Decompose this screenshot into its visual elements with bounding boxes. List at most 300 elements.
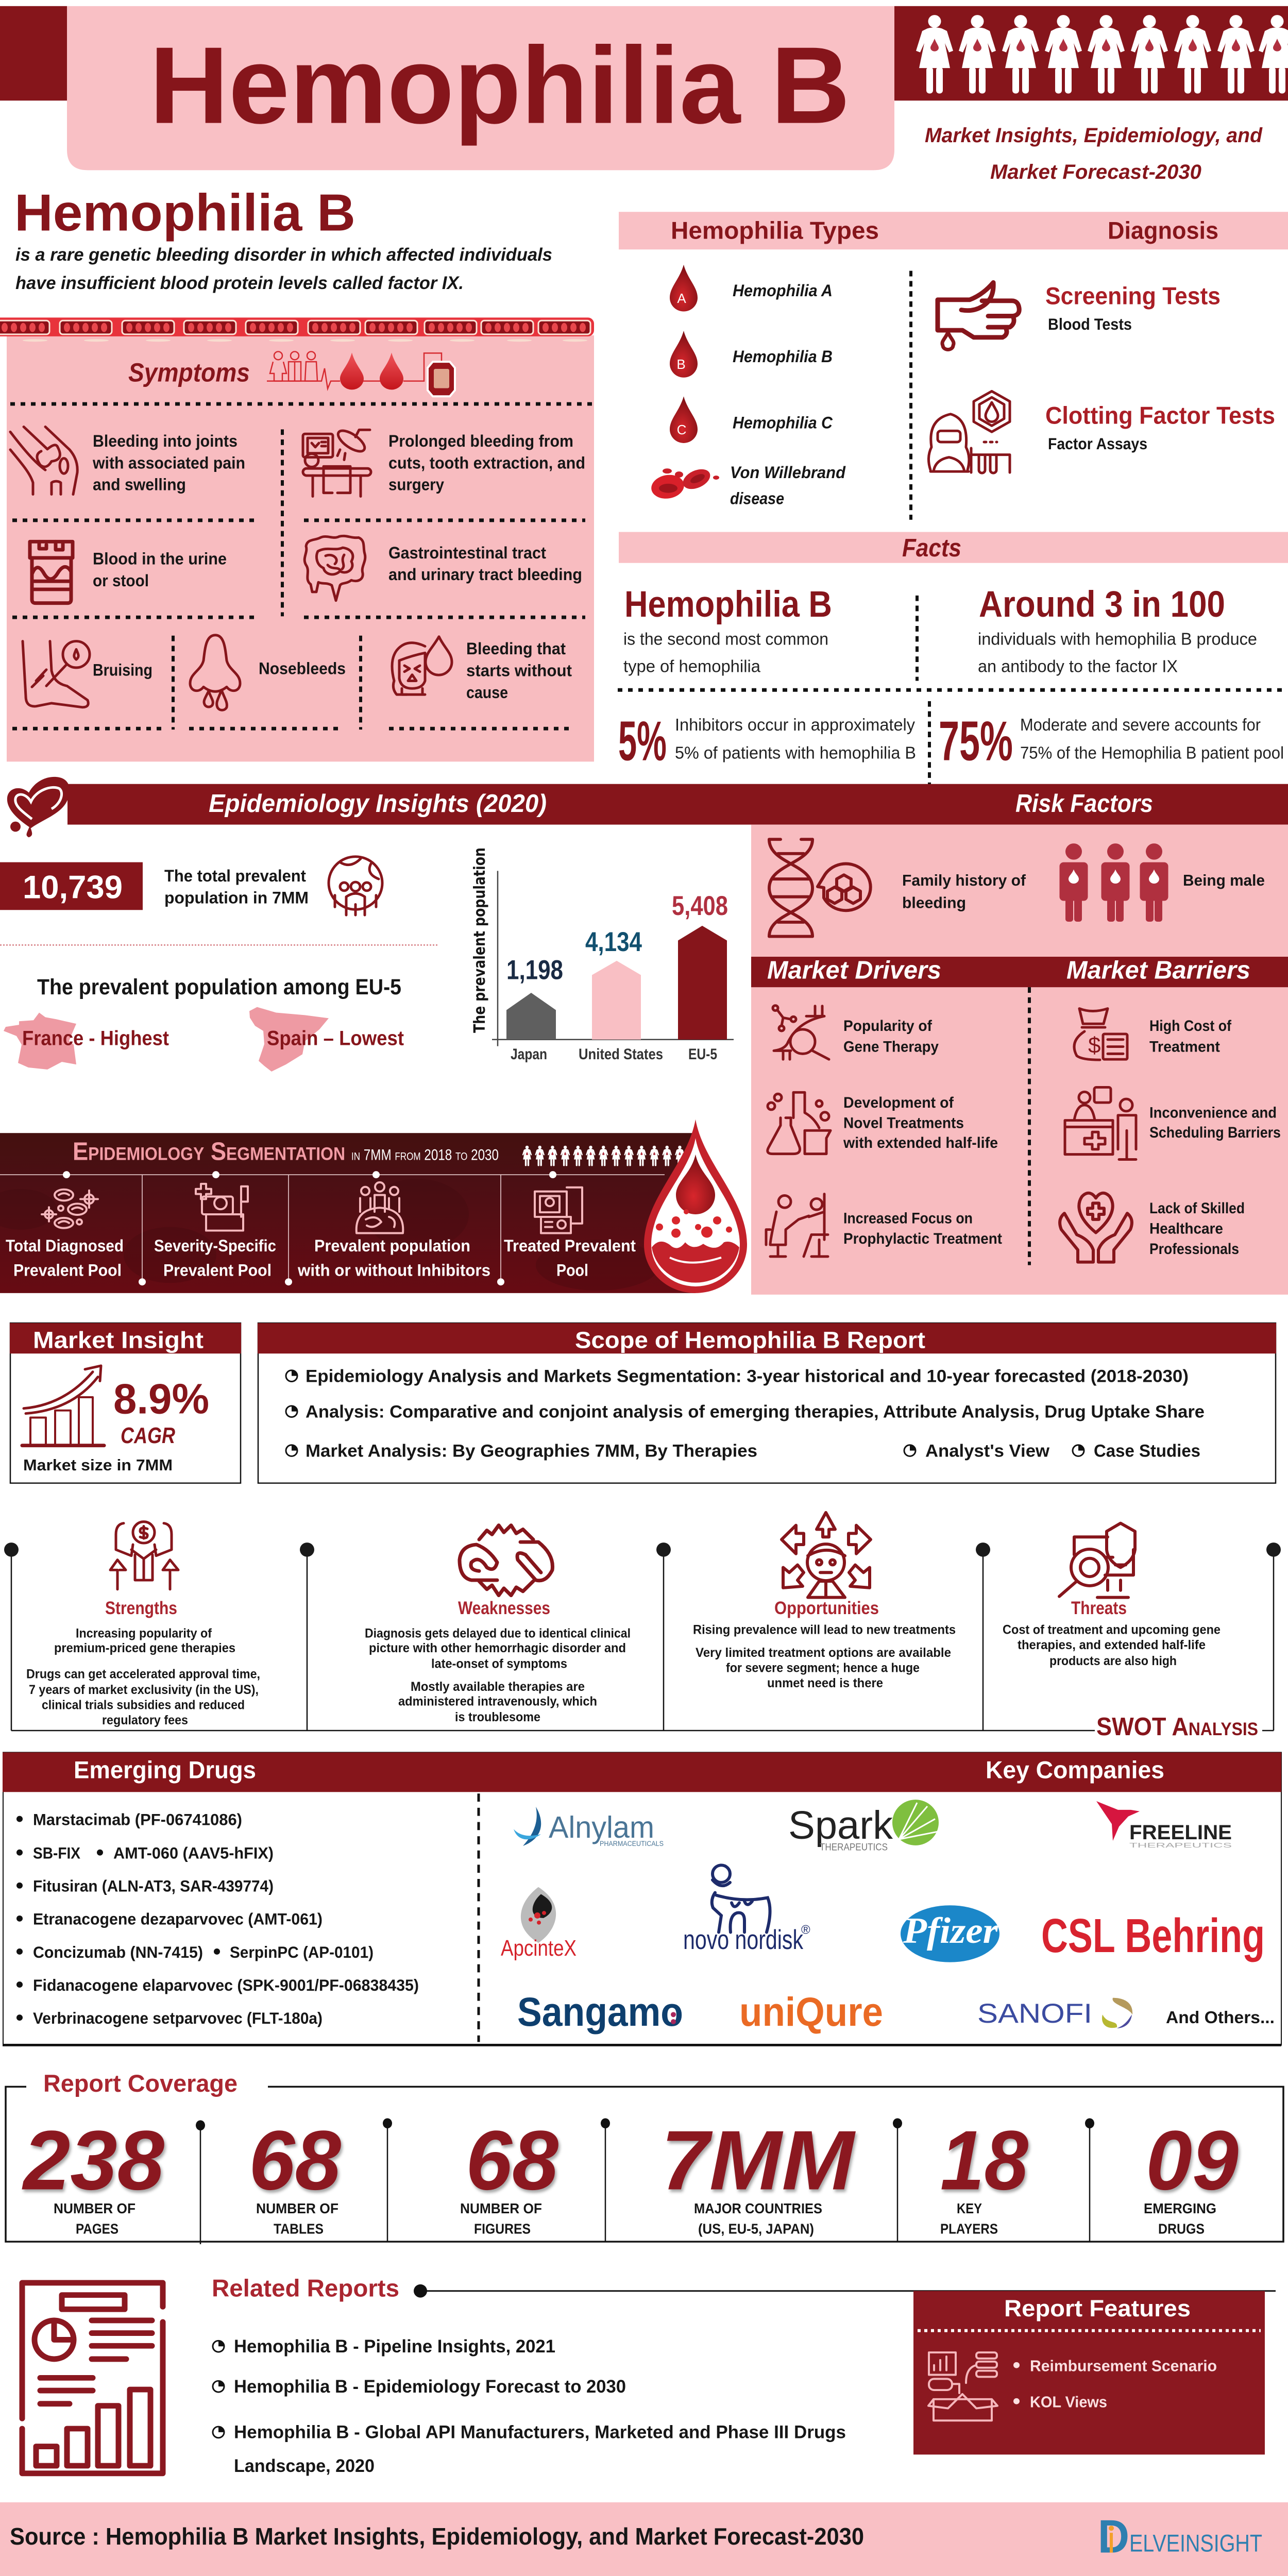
emerging drugs list: AMT-060 (AAV5-hFIX) — [113, 1844, 274, 1862]
drivers barriers header — [751, 956, 1288, 987]
chart: prevalent population — [471, 848, 734, 1063]
segment text: diagnosed — [6, 1236, 124, 1279]
driver text: novel treatments: Development of — [843, 1094, 954, 1111]
fact: 75 percent: Moderate and severe accounts for — [1020, 715, 1261, 735]
stat: key players: PLAYERS — [940, 2221, 998, 2236]
report features list: KOL Views — [1030, 2393, 1107, 2411]
map: Spain: Spain – Lowest — [267, 1027, 404, 1050]
icon: foot bruise — [23, 641, 90, 707]
symptom text: joints: and swelling — [93, 475, 186, 494]
icon: doctor and patient — [766, 1194, 828, 1257]
market insight header: Market Insight — [33, 1327, 204, 1353]
epidemiology banner: Risk Factors — [1015, 789, 1153, 818]
intro text — [15, 244, 552, 293]
fact: second most common: type of hemophilia — [623, 657, 760, 676]
barrier text: scheduling: Inconvenience and — [1149, 1105, 1277, 1122]
fact: 75 percent: 75% — [939, 710, 1013, 772]
bar: EU-5: EU-5 — [688, 1046, 717, 1063]
symptom text: joints: with associated pain — [92, 453, 245, 472]
dividers — [10, 404, 594, 730]
stat: figures: NUMBER OF — [460, 2200, 542, 2216]
symptom text: bleeding cuts: surgery — [388, 475, 445, 494]
map: France — [4, 1012, 169, 1070]
segment text: inhibitors: Prevalent population — [314, 1236, 470, 1255]
SWOT text: threats: Cost of treatment and upcoming gene — [1003, 1623, 1221, 1637]
segmentation heading: Epidemiology Segmentation — [73, 1137, 345, 1165]
map: Spain — [249, 1007, 404, 1072]
scope item 3: Market Analysis: By Geographies 7MM, By Therapies — [306, 1442, 757, 1461]
barrier text: scheduling — [1149, 1105, 1281, 1141]
logo: Pfizer — [901, 1905, 999, 1962]
segment text: inhibitors: with or without Inhibitors — [297, 1261, 490, 1279]
screening tests text: Blood Tests — [1048, 315, 1132, 333]
stat: total prevalent population: The total prevalent — [164, 866, 306, 885]
SWOT text: threats: products are also high — [1049, 1654, 1177, 1668]
SWOT text: opportunities: unmet need is there — [767, 1676, 883, 1690]
icon: strengths — [110, 1522, 178, 1589]
drugs companies header: Emerging Drugs — [74, 1757, 256, 1784]
barrier text: skilled professionals: Healthcare — [1149, 1221, 1223, 1237]
panel: report coverage — [6, 2070, 1283, 2244]
source line: Source : Hemophilia B Market Insights, Epidemiology, and Market Forecast-2030 — [10, 2523, 864, 2550]
icon: hands holding heart — [1060, 1193, 1132, 1262]
logo: Sanofi: SANOFI — [977, 1998, 1092, 2029]
EU-5 heading: The prevalent population among EU-5 — [37, 975, 401, 999]
driver text: prophylactic: Increased Focus on — [843, 1210, 973, 1227]
market insight header — [10, 1323, 241, 1353]
symptom text: gastrointestinal: and urinary tract bleeding — [388, 565, 582, 584]
bar: Japan: Japan — [511, 1046, 547, 1063]
emerging drugs list: Etranacogene dezaparvovec (AMT-061) — [33, 1910, 323, 1928]
related reports heading — [212, 2275, 1276, 2302]
drivers barriers header: Market Barriers — [1066, 956, 1250, 984]
map: France: France - Highest — [22, 1027, 169, 1050]
stat: figures: 68 — [466, 2113, 558, 2207]
scope item 1: Epidemiology Analysis and Markets Segmentation: 3-year historical and 10-year forecasted (2018-2030) — [306, 1367, 1189, 1386]
driver text: gene therapy — [843, 1018, 939, 1055]
icon: patient and drip — [196, 1184, 248, 1231]
icon: cell bubble — [818, 864, 871, 910]
SWOT text: threats — [1003, 1623, 1221, 1668]
SWOT text: opportunities: Very limited treatment options are available — [696, 1646, 951, 1660]
SWOT text: opportunities: Rising prevalence will lead to new treatments — [693, 1623, 956, 1637]
driver text: prophylactic — [843, 1210, 1002, 1247]
screening tests text — [1045, 283, 1221, 333]
icon: box and data — [928, 2352, 997, 2420]
stat: tables: 68 — [249, 2113, 341, 2207]
symptoms heading: Symptoms — [128, 358, 250, 387]
stat: emerging drugs: DRUGS — [1158, 2221, 1205, 2236]
drugs companies header: Key Companies — [986, 1757, 1164, 1784]
decorative thin line — [0, 944, 438, 945]
symptom text: without cause: starts without — [466, 661, 572, 680]
coverage heading: Report Coverage — [43, 2070, 238, 2097]
logo: uniQure: uniQure — [739, 1989, 883, 2035]
related report 2: Hemophilia B - Epidemiology Forecast to 2030 — [234, 2376, 626, 2397]
type labels: Hemophilia B — [733, 347, 833, 366]
logo: Pfizer: Pfizer — [903, 1911, 998, 1951]
related report 3: Hemophilia B - Global API Manufacturers, Marketed and Phase III Drugs — [234, 2422, 846, 2443]
fact: second most common — [623, 584, 832, 676]
scope item 4: Analyst's View — [925, 1442, 1050, 1461]
icon: drop B: B — [676, 358, 686, 372]
risk text: family history: Family history of — [902, 871, 1026, 889]
icon: three men — [1059, 843, 1168, 922]
symptom text: bleeding cuts: cuts, tooth extraction, and — [388, 453, 585, 472]
driver text: prophylactic: Prophylactic Treatment — [843, 1230, 1002, 1247]
fact: 75 percent — [939, 710, 1284, 772]
SWOT text: weaknesses — [365, 1627, 631, 1724]
driver text: novel treatments: Novel Treatments — [843, 1115, 964, 1131]
type labels — [730, 281, 846, 507]
logo: Sangamo: Sangamo — [517, 1989, 683, 2035]
logo: Novo Nordisk — [683, 1865, 810, 1955]
SWOT text: weaknesses: Mostly available therapies are — [411, 1680, 585, 1694]
footer band — [0, 2502, 1288, 2576]
risk text: family history — [902, 871, 1026, 911]
panel: emerging drugs and key companies — [3, 1752, 1281, 2045]
logo: Sanofi — [977, 1998, 1132, 2029]
stat: key players: 18 — [940, 2113, 1028, 2207]
icon: drop A: A — [677, 292, 686, 306]
icon: reception desk — [1065, 1087, 1136, 1159]
panel: types and diagnosis — [619, 212, 1288, 520]
emerging drugs list: SB-FIX — [33, 1844, 80, 1862]
scope item 5: Case Studies — [1094, 1442, 1200, 1461]
icon: lab technician — [928, 391, 1010, 473]
type labels: Hemophilia C — [733, 413, 833, 432]
stat: emerging drugs: 09 — [1146, 2113, 1239, 2207]
clotting factor text: Clotting Factor Tests — [1045, 402, 1275, 429]
barrier text: high cost: High Cost of — [1149, 1018, 1231, 1035]
clotting factor text: Factor Assays — [1048, 434, 1147, 453]
CAGR value: 8.9% — [113, 1375, 209, 1422]
segment text: diagnosed: Prevalent Pool — [13, 1261, 122, 1279]
symptom text: urine: or stool — [93, 571, 149, 590]
drugs companies header — [3, 1752, 1281, 1792]
subtitle: Market Forecast-2030 — [990, 161, 1201, 183]
SWOT text: weaknesses: is troublesome — [455, 1710, 540, 1724]
report features heading: Report Features — [1004, 2295, 1191, 2321]
SWOT text: strengths: Increasing popularity of — [76, 1627, 212, 1640]
row of people — [522, 1146, 685, 1166]
logo: Alnylam: PHARMACEUTICALS — [600, 1839, 664, 1848]
icon: knee joint — [10, 427, 77, 495]
bar: Japan: 1,198 — [506, 955, 563, 985]
type labels: Von Willebrand — [730, 463, 846, 482]
logo: Freeline — [1096, 1801, 1232, 1849]
bar: EU-5: 5,408 — [672, 890, 728, 921]
fact: 5 percent — [618, 710, 916, 772]
icon: growth chart — [22, 1366, 104, 1446]
icon: patient record — [535, 1188, 582, 1233]
icon: flasks — [768, 1092, 831, 1154]
SWOT label: SWOT Analysis — [1096, 1712, 1258, 1741]
SWOT text: strengths: 7 years of market exclusivity (in the US), — [29, 1683, 259, 1697]
fact: around 3 in 100: an antibody to the factor IX — [978, 657, 1178, 676]
panel: scope of report — [258, 1323, 1276, 1483]
SWOT text: weaknesses: picture with other hemorrhagic disorder and — [369, 1641, 626, 1655]
icon: people on globe — [357, 1182, 403, 1233]
barrier text: skilled professionals: Lack of Skilled — [1149, 1200, 1245, 1217]
icon: people on globe — [329, 857, 382, 915]
types diagnosis header: Diagnosis — [1108, 217, 1218, 244]
icon: nose — [190, 635, 240, 710]
stat: tables: TABLES — [274, 2221, 324, 2236]
main title: Hemophilia B — [149, 25, 850, 146]
bar: United States: United States — [579, 1046, 663, 1063]
SWOT frame lines — [4, 1543, 1281, 1731]
logo: Spark Therapeutics: Spark — [788, 1804, 893, 1848]
report features list: Reimbursement Scenario — [1030, 2357, 1217, 2375]
stat: pages: PAGES — [76, 2221, 118, 2236]
emerging drugs list — [16, 1810, 419, 2027]
header bar left — [0, 6, 67, 100]
stat: tables: NUMBER OF — [256, 2200, 338, 2216]
report features list — [1013, 2357, 1217, 2411]
type labels: Hemophilia A — [733, 281, 833, 300]
types diagnosis header: Hemophilia Types — [671, 217, 879, 244]
facts heading — [619, 532, 1288, 563]
segment text: treated — [504, 1236, 636, 1279]
stat: major countries: MAJOR COUNTRIES — [694, 2200, 822, 2216]
stat: emerging drugs: EMERGING — [1144, 2200, 1216, 2216]
related report 1: Hemophilia B - Pipeline Insights, 2021 — [234, 2336, 555, 2357]
intro heading: Hemophilia B — [14, 183, 355, 242]
fact: 5 percent: 5% of patients with hemophilia B — [675, 743, 916, 762]
SWOT text: weaknesses: Diagnosis gets delayed due to identical clinical — [365, 1627, 631, 1640]
SWOT title: opportunities: Opportunities — [774, 1598, 879, 1618]
icon: hand blood test — [938, 282, 1019, 350]
bar: United States — [579, 926, 663, 1063]
scope item 2: Analysis: Comparative and conjoint analysis of emerging therapies, Attribute Analysis, Drug Uptake Share — [306, 1402, 1205, 1421]
SWOT title: strengths: Strengths — [105, 1598, 177, 1618]
intro text: have insufficient blood protein levels called factor IX. — [15, 273, 464, 293]
icon: opportunities arrows — [782, 1513, 871, 1598]
logo: Spark Therapeutics: THERAPEUTICS — [820, 1842, 888, 1853]
logo: DelveInsight: D — [1098, 2511, 1129, 2563]
and others: And Others... — [1166, 2008, 1275, 2027]
logo: Alnylam: Alnylam — [549, 1810, 654, 1844]
SWOT text: opportunities — [693, 1623, 956, 1690]
risk text: family history: bleeding — [902, 894, 966, 911]
divider — [1028, 987, 1031, 1265]
driver text: gene therapy: Gene Therapy — [843, 1039, 939, 1055]
market size caption: Market size in 7MM — [23, 1456, 173, 1474]
panel: risk factors and market — [751, 825, 1288, 1295]
header bar right with row of women — [894, 6, 1288, 100]
fact: second most common: Hemophilia B — [624, 584, 832, 625]
fact: 5 percent: 5% — [618, 710, 667, 772]
icon: intestine — [304, 536, 365, 601]
panel: symptoms — [0, 317, 594, 761]
driver text: novel treatments: with extended half-life — [843, 1134, 998, 1151]
divider — [918, 2329, 1261, 2332]
subtitle: Market Insights, Epidemiology, and — [925, 124, 1263, 147]
icon: gene magnifier — [773, 1006, 829, 1059]
CAGR value — [113, 1375, 209, 1448]
bar: United States: 4,134 — [585, 926, 642, 957]
icon: money bag calculator — [1074, 1009, 1127, 1060]
axis title: The prevalent population — [471, 848, 489, 1033]
type labels: disease — [730, 489, 784, 507]
panel: report features — [913, 2291, 1265, 2454]
logo: Freeline: THERAPEUTICS — [1129, 1841, 1232, 1849]
stat: figures: FIGURES — [474, 2221, 531, 2236]
bar: EU-5 — [672, 890, 728, 1063]
symptom text: urine: Blood in the urine — [93, 549, 227, 568]
types diagnosis header — [619, 212, 1288, 249]
emerging drugs list: Concizumab (NN-7415) — [33, 1943, 203, 1961]
icon: urine cup — [30, 541, 73, 603]
icon: drop C — [670, 396, 698, 443]
barrier text: high cost: Treatment — [1149, 1039, 1220, 1055]
icon: drop C: C — [677, 423, 686, 437]
segmentation heading: in 7MM from 2018 to 2030 — [351, 1147, 499, 1163]
logo: DelveInsight — [1098, 2511, 1262, 2563]
stat: key players: KEY — [957, 2200, 982, 2216]
logo: Spark Therapeutics — [788, 1800, 939, 1853]
related report 3 — [213, 2422, 846, 2476]
logo: Alnylam — [514, 1807, 664, 1848]
stat: major countries: (US, EU-5, JAPAN) — [698, 2221, 814, 2236]
driver text: novel treatments — [843, 1094, 998, 1151]
barrier text: skilled professionals: Professionals — [1149, 1241, 1239, 1258]
logo: ApcinteX — [501, 1887, 577, 1961]
icon: blood cells — [42, 1190, 98, 1228]
icon: drop B — [670, 331, 698, 378]
logo: Novo Nordisk: novo nordisk — [683, 1924, 803, 1955]
divider — [909, 271, 912, 520]
icon: DNA — [769, 839, 812, 937]
facts heading: Facts — [902, 533, 961, 562]
SWOT text: strengths: Drugs can get accelerated approval time, — [26, 1668, 260, 1681]
SWOT text: strengths: clinical trials subsidies and reduced — [42, 1699, 245, 1713]
emerging drugs list: SerpinPC (AP-0101) — [230, 1943, 374, 1961]
coverage frame — [6, 2087, 1283, 2244]
related report 3: Landscape, 2020 — [234, 2455, 375, 2476]
fact: 5 percent: Inhibitors occur in approximately — [675, 715, 915, 735]
axes — [492, 871, 734, 1046]
symptom text: without cause — [466, 639, 572, 702]
panel: market insight — [10, 1323, 241, 1483]
segment text: inhibitors — [297, 1236, 490, 1279]
icon: money bag calculator: $ — [1088, 1033, 1100, 1058]
divider — [477, 1793, 480, 2042]
icon: drop A — [670, 265, 698, 312]
emerging drugs list: Fitusiran (ALN-AT3, SAR-439774) — [33, 1877, 274, 1895]
scope header — [258, 1323, 1276, 1353]
driver text: gene therapy: Popularity of — [843, 1018, 932, 1035]
icon: face with blood drop — [392, 637, 452, 694]
screening tests text: Screening Tests — [1045, 283, 1221, 310]
segment text: severity: Prevalent Pool — [163, 1261, 272, 1279]
icon: blood donation line — [267, 351, 455, 396]
stat: total prevalent population: 10,739 — [23, 869, 123, 905]
segment text: severity — [154, 1236, 276, 1279]
epidemiology banner — [67, 784, 1288, 825]
logo: Novo Nordisk: ® — [801, 1923, 810, 1937]
SWOT text: threats: therapies, and extended half-life — [1018, 1638, 1206, 1652]
fact: second most common: is the second most common — [623, 630, 828, 649]
SWOT text: strengths: premium-priced gene therapies — [54, 1641, 235, 1655]
intro text: is a rare genetic bleeding disorder in which affected individuals — [15, 244, 552, 265]
fact: around 3 in 100: individuals with hemophilia B produce — [978, 630, 1257, 649]
dividers — [618, 596, 1282, 785]
emerging drugs list: Fidanacogene elaparvovec (SPK-9001/PF-06838435) — [33, 1976, 419, 1994]
segment text: severity: Severity-Specific — [154, 1236, 276, 1255]
stat: pages: 238 — [22, 2113, 164, 2207]
logo: Freeline: FREELINE — [1129, 1821, 1232, 1844]
panel: SWOT analysis — [4, 1513, 1281, 1741]
emerging drugs list: Verbrinacogene setparvovec (FLT-180a) — [33, 2009, 323, 2027]
SWOT text: weaknesses: administered intravenously, which — [398, 1695, 597, 1709]
stat: total prevalent population — [0, 862, 309, 910]
bar: Japan — [506, 955, 563, 1063]
risk text: being male: Being male — [1183, 871, 1265, 889]
symptom text: bruising: Bruising — [93, 660, 152, 680]
subtitle — [925, 124, 1263, 183]
stat: total prevalent population: population in 7MM — [164, 888, 309, 907]
icon: threats magnifier and shield — [1059, 1523, 1135, 1598]
segment text: diagnosed: Total Diagnosed — [6, 1236, 124, 1255]
fact: around 3 in 100 — [978, 584, 1257, 676]
symptom text: gastrointestinal — [388, 543, 582, 584]
title panel — [67, 6, 894, 170]
fact: around 3 in 100: Around 3 in 100 — [979, 584, 1225, 625]
symptom text: bleeding cuts: Prolonged bleeding from — [388, 431, 573, 450]
panel: epidemiology segmentation — [0, 1133, 696, 1293]
SWOT title: weaknesses: Weaknesses — [458, 1598, 550, 1618]
symptom text: gastrointestinal: Gastrointestinal tract — [388, 543, 546, 562]
symptom text: urine — [93, 549, 227, 590]
symptom text: joints — [92, 431, 245, 494]
blood vessel strip — [0, 317, 594, 342]
barrier text: skilled professionals — [1149, 1200, 1245, 1258]
emerging drugs list: Marstacimab (PF-06741086) — [33, 1810, 242, 1828]
timeline lines — [0, 1171, 665, 1285]
SWOT text: strengths — [26, 1627, 260, 1727]
icon: heart drop — [7, 777, 70, 837]
segment text: treated: Pool — [556, 1261, 588, 1279]
CAGR value: CAGR — [121, 1423, 175, 1448]
icon: large blood drop — [644, 1120, 747, 1293]
icon: weaknesses broken chain — [460, 1526, 552, 1596]
icon: red blood cells — [649, 465, 719, 501]
epidemiology banner: Epidemiology Insights (2020) — [209, 789, 547, 818]
SWOT title: threats: Threats — [1071, 1598, 1127, 1618]
logo: ApcinteX: ApcinteX — [501, 1936, 577, 1961]
symptom text: nosebleeds: Nosebleeds — [259, 659, 346, 678]
icon: surgery — [303, 427, 371, 497]
SWOT text: strengths: regulatory fees — [102, 1714, 188, 1727]
stat: pages: NUMBER OF — [54, 2200, 135, 2216]
panel: facts — [618, 532, 1288, 785]
scope header: Scope of Hemophilia B Report — [575, 1327, 925, 1353]
related reports heading: Related Reports — [212, 2275, 399, 2302]
stat: major countries: 7MM — [661, 2113, 856, 2207]
logo: DelveInsight: ELVEINSIGHT — [1129, 2530, 1262, 2557]
clotting factor text — [1045, 402, 1275, 453]
symptom text: without cause: Bleeding that — [466, 639, 566, 658]
symptom text: joints: Bleeding into joints — [93, 431, 238, 450]
icon: report document — [22, 2283, 163, 2473]
symptom text: bleeding cuts — [388, 431, 585, 494]
barrier text: high cost — [1149, 1018, 1231, 1055]
symptom text: without cause: cause — [466, 683, 508, 702]
SWOT text: opportunities: for severe segment; hence a huge — [726, 1662, 920, 1675]
drivers barriers header: Market Drivers — [767, 956, 941, 984]
